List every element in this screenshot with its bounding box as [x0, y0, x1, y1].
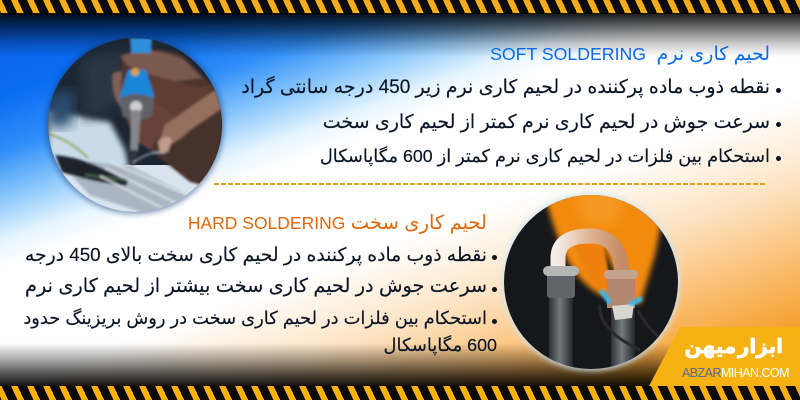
- point 3: استحکام بین فلزات در لحیم کاری سخت در روش بریزینگ حدود: [23, 308, 487, 328]
- top hazard stripe band: [0, 0, 800, 14]
- photo: soldering iron in hands: [43, 36, 228, 218]
- point 2: سرعت جوش در لحیم کاری نرم کمتر از لحیم کاری سخت: [323, 112, 770, 133]
- list: hard soldering points: 600 مگاپاسکال: [384, 335, 497, 355]
- point 3: استحکام بین فلزات در لحیم کاری نرم کمتر از 600 مگاپاسکال: [320, 146, 770, 166]
- bottom hazard stripe band: [0, 386, 800, 400]
- point 1: نقطه ذوب ماده پرکننده در لحیم کاری نرم زیر 450 درجه سانتی گراد: [241, 77, 770, 98]
- list: soft soldering points: [241, 76, 781, 167]
- point 2: سرعت جوش در لحیم کاری سخت بیشتر از لحیم کاری نرم: [25, 276, 487, 297]
- logo url: ABZARMIHAN.COM: [682, 366, 789, 380]
- heading: soft soldering: لحیم کاری نرم SOFT SOLDERING: [490, 44, 770, 65]
- point 1: نقطه ذوب ماده پرکننده در لحیم کاری سخت بالای 450 درجه: [25, 244, 487, 265]
- photo: brazing a copper pipe with flame: [500, 190, 684, 376]
- logo badge: [649, 327, 800, 386]
- logo wordmark: ابزار میهن: [685, 336, 783, 358]
- list: hard soldering points: [23, 244, 497, 356]
- dashed divider: [214, 183, 767, 185]
- heading: hard soldering: لحیم کاری سخت HARD SOLDERING: [188, 212, 487, 234]
